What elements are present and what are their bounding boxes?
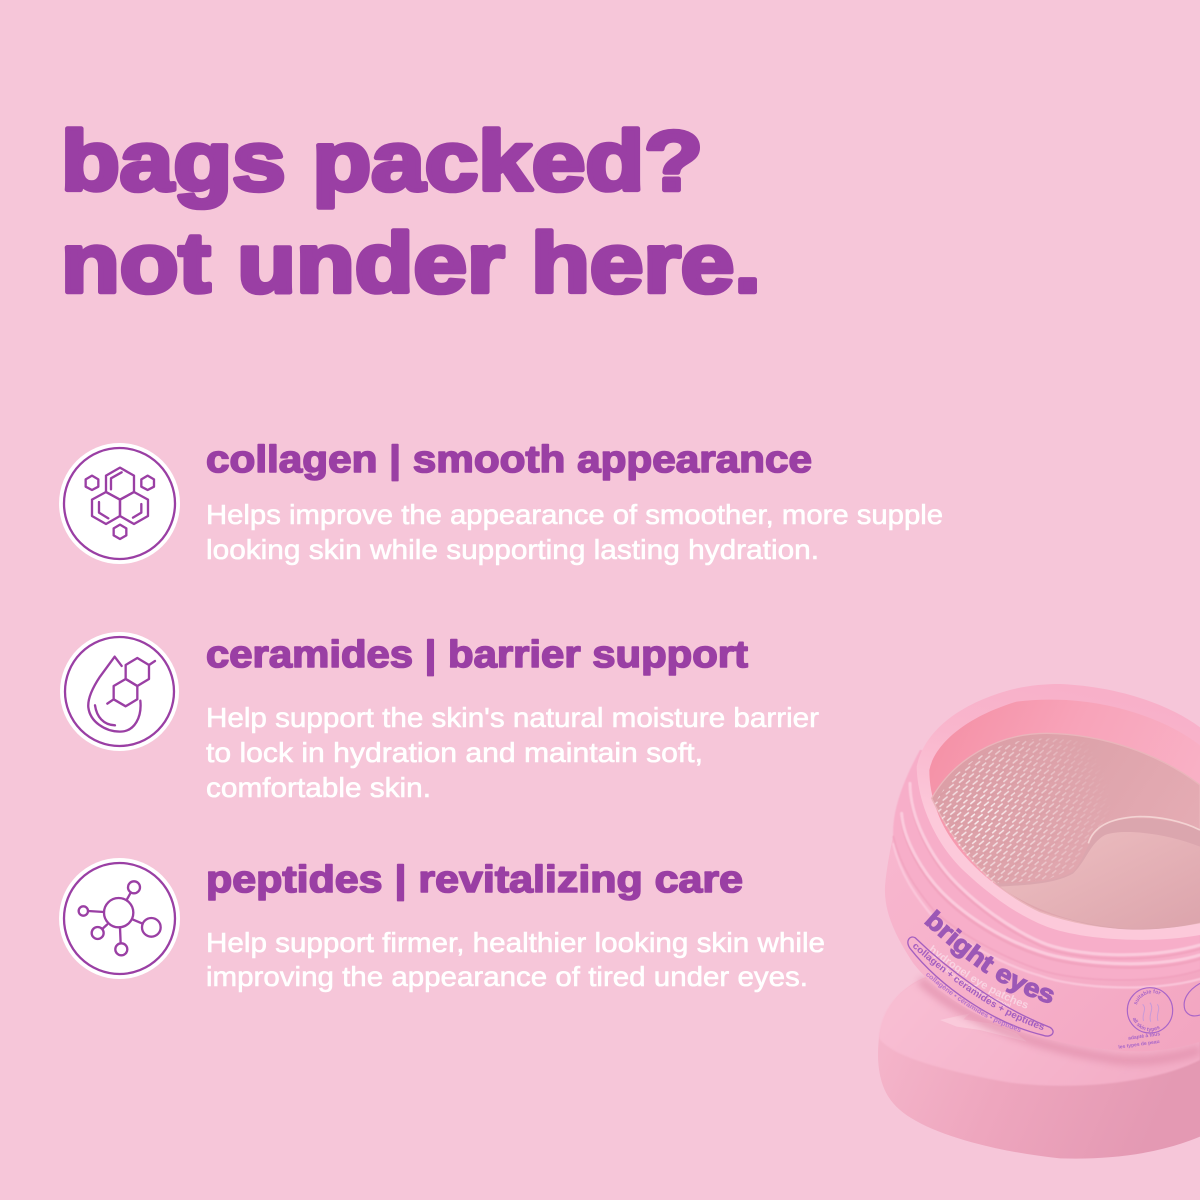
jar badge: suitable for all skin types: les types de peau (1118, 1039, 1160, 1051)
panel: peptides (59, 858, 825, 992)
text: peptides description (206, 927, 825, 992)
text: ceramides description: comfortable skin. (206, 772, 431, 803)
text: collagen description (206, 499, 943, 565)
jar badge: suitable for all skin types: suitable for (1134, 989, 1161, 1005)
jar label: timbres pour les yeux hydrogel (939, 964, 1011, 1008)
eye patch front (995, 817, 1200, 930)
icon: ceramides droplet molecule (60, 632, 179, 751)
text: ceramides description: to lock in hydration and maintain soft, (206, 737, 703, 768)
jar badge: second partial (1184, 983, 1200, 1016)
jar badge: suitable for all skin types: adapté à tous (1128, 1031, 1161, 1042)
jar badge: suitable for all skin types: all skin types (1132, 1018, 1160, 1032)
text: peptides description: Help support firmer, healthier looking skin while (206, 927, 825, 958)
text: ceramides description: Help support the skin's natural moisture barrier (206, 702, 819, 733)
icon: peptides network molecule (59, 858, 180, 979)
text: ceramides description (206, 702, 819, 803)
threaded neck (893, 750, 1200, 987)
heading: collagen: collagen | smooth appearance (206, 439, 812, 481)
product: jar on pedestal (878, 684, 1200, 1159)
jar badge: suitable for all skin types (1118, 987, 1174, 1051)
panel: ceramides (60, 632, 819, 803)
pedestal (878, 977, 1200, 1159)
text: collagen description: Helps improve the appearance of smoother, more supple (206, 499, 943, 530)
heading: peptides: peptides | revitalizing care (206, 859, 743, 901)
jar label: bright eyes (924, 909, 1054, 1004)
inner wall (929, 700, 1200, 929)
jar body (885, 750, 1200, 1051)
text: collagen description: looking skin while supporting lasting hydration. (206, 534, 819, 565)
heading: ceramides: ceramides | barrier support (206, 634, 748, 676)
jar label: collagen + ceramides + peptides (913, 944, 1044, 1030)
icon: collagen hexagon molecule (59, 443, 180, 564)
eye patch back with texture (932, 733, 1200, 929)
jar label: collagène • céramides • peptides (926, 973, 1021, 1032)
jar rim (917, 684, 1200, 940)
title: bags packed? (61, 114, 703, 208)
jar label: hydrogel eye patches (930, 945, 1028, 1008)
title: not under here. (61, 216, 761, 310)
title (61, 114, 761, 310)
panel: collagen (59, 439, 943, 565)
jar label (907, 909, 1054, 1037)
text: peptides description: improving the appearance of tired under eyes. (206, 961, 808, 992)
